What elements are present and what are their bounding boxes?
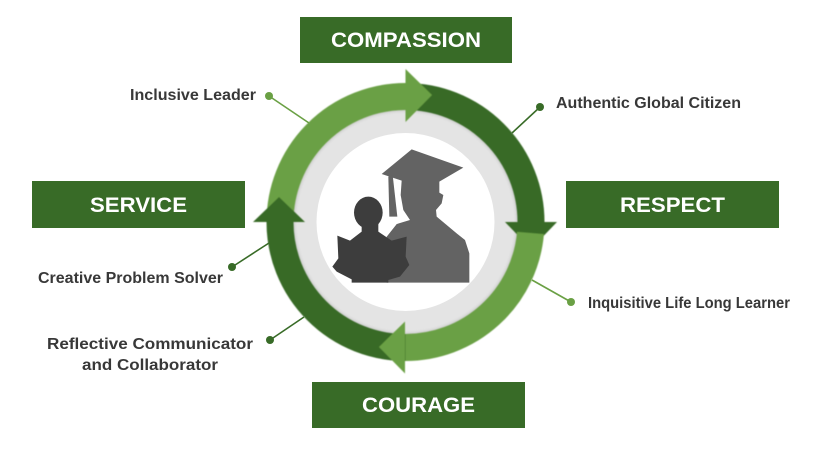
callout: authentic global citizen — [512, 95, 741, 133]
callout: creative problem solver — [38, 243, 269, 287]
callout: inquisitive life long learner — [532, 280, 790, 312]
inner disc: grey ring and white centre — [292, 108, 520, 336]
callout: reflective communicator and collaborator: Reflective Communicator — [47, 336, 253, 353]
heading box: courage — [312, 382, 525, 428]
heading box: courage: COURAGE — [362, 393, 475, 417]
heading box: respect — [566, 181, 779, 228]
arrow arc: light green, right to bottom — [405, 233, 530, 348]
reader silhouette — [332, 197, 409, 283]
callout: inclusive leader — [130, 87, 309, 123]
graduate silhouette — [382, 149, 469, 283]
callout: creative problem solver: Creative Problem Solver — [38, 270, 223, 287]
arrowhead: light green, top — [406, 69, 432, 122]
icon: graduate and reader silhouette — [332, 149, 469, 283]
callout: reflective communicator and collaborator — [47, 317, 304, 374]
cycle ring with four arrows — [253, 69, 557, 374]
heading box: compassion: COMPASSION — [331, 28, 481, 52]
callout: inquisitive life long learner: Inquisitive Life Long Learner — [588, 295, 790, 312]
gap between figures — [382, 217, 409, 237]
arrowhead: light green, bottom — [379, 322, 405, 374]
heading box: service — [32, 181, 245, 228]
arrow arc: light green, left to top — [280, 96, 406, 222]
callout: inclusive leader: Inclusive Leader — [130, 87, 256, 104]
heading box: compassion — [300, 17, 512, 63]
callout: reflective communicator and collaborator: and Collaborator — [82, 357, 218, 374]
heading box: service: SERVICE — [90, 193, 187, 217]
arrow: dark green, top to right — [406, 96, 557, 249]
arrow: dark green, bottom to left — [253, 197, 406, 348]
heading box: respect: RESPECT — [620, 193, 725, 217]
callout: authentic global citizen: Authentic Global Citizen — [556, 95, 741, 112]
